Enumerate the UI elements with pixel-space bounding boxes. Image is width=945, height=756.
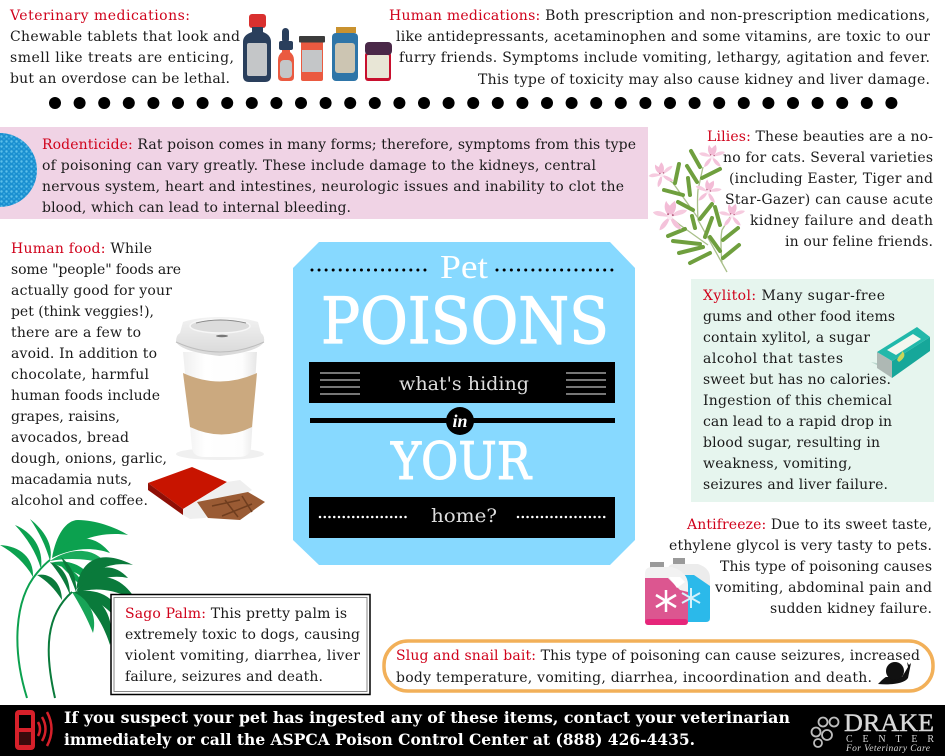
logo: Drake Center: CENTER <box>846 734 934 745</box>
text block: lilies: kidney failure and death <box>750 213 933 229</box>
text block: human medications <box>389 8 930 88</box>
panel: sago palm <box>111 594 370 694</box>
text block: human food: avoid. In addition to <box>11 346 157 362</box>
panel: xylitol: gums and other food items <box>703 309 895 325</box>
panel: rodenticide: of poisoning can vary greatly. These include damage to the kidneys, central <box>42 158 597 174</box>
text block: lilies: (including Easter, Tiger and <box>729 171 933 187</box>
panel: xylitol: seizures and liver failure. <box>703 477 888 493</box>
text block: human food: actually good for your <box>11 283 172 299</box>
icon: snail <box>878 662 911 684</box>
text block: human food: there are a few to <box>11 325 141 341</box>
band: what's hiding: what's hiding <box>399 373 529 395</box>
panel: xylitol: contain xylitol, a sugar <box>703 330 870 346</box>
dotted rule: top left <box>312 268 432 272</box>
text block: antifreeze: ethylene glycol is very tasty to pets. <box>669 538 932 554</box>
panel: xylitol: Xylitol: Many sugar-free <box>703 288 885 304</box>
panel: sago palm: violent vomiting, diarrhea, liver <box>124 648 360 664</box>
panel: slug and snail bait: Slug and snail bait: This type of poisoning can cause seizures, increased <box>396 648 920 664</box>
band: what's hiding <box>309 362 615 403</box>
text block: human medications: furry friends. Symptoms include vomiting, lethargy, agitation and fever. <box>399 50 930 66</box>
icon: blue pellets circle <box>0 133 37 207</box>
heading: POISONS: POISONS <box>321 285 609 359</box>
text block: human food: chocolate, harmful <box>11 367 150 383</box>
dotted rule: top right <box>497 268 612 272</box>
panel: xylitol: Ingestion of this chemical <box>703 393 893 409</box>
text block: human food: grapes, raisins, <box>11 409 120 425</box>
panel: sago palm: Sago Palm: This pretty palm is <box>125 606 347 622</box>
dotted divider <box>49 97 897 109</box>
text block: human medications: This type of toxicity may also cause kidney and liver damage. <box>478 72 930 88</box>
text block: human food: alcohol and coffee. <box>11 493 148 509</box>
icon: gum pack <box>871 327 930 378</box>
text block: antifreeze: This type of poisoning causes <box>720 559 932 575</box>
text block: human food: dough, onions, garlic, <box>11 451 167 467</box>
panel: xylitol: weakness, vomiting, <box>703 456 852 472</box>
icon: coffee cup <box>176 317 264 460</box>
icon: phone <box>15 710 52 750</box>
panel: xylitol: blood sugar, resulting in <box>703 435 880 451</box>
text block: lilies: Star-Gazer) can cause acute <box>725 192 933 208</box>
footer message: immediately or call the ASPCA Poison Control Center at (888) 426-4435. <box>64 730 695 749</box>
icon: antifreeze jugs <box>645 558 710 625</box>
text block: lilies: Lilies: These beauties are a no- <box>707 129 933 145</box>
text block: human food: pet (think veggies!), <box>11 304 154 320</box>
text block: antifreeze: Antifreeze: Due to its sweet taste, <box>686 517 932 533</box>
icon: lily plant <box>646 145 745 272</box>
text block: human medications: Human medications: Both prescription and non-prescription medications, <box>389 8 930 24</box>
band: home? <box>309 497 615 538</box>
heading: YOUR: YOUR <box>390 433 532 492</box>
panel: rodenticide: Rodenticide: Rat poison comes in many forms; therefore, symptoms from this type <box>42 137 636 153</box>
panel: sago palm: failure, seizures and death. <box>125 669 323 685</box>
text block: antifreeze: sudden kidney failure. <box>770 601 932 617</box>
text block: lilies: in our feline friends. <box>785 234 933 250</box>
panel: slug and snail bait: body temperature, vomiting, diarrhea, incoordination and death. <box>396 670 872 686</box>
footer message <box>64 708 790 749</box>
text block: human food: avocados, bread <box>11 430 129 446</box>
text block: human food: human foods include <box>11 388 160 404</box>
text block: veterinary medications <box>9 8 240 87</box>
panel: xylitol: can lead to a rapid drop in <box>703 414 892 430</box>
footer bar <box>0 705 945 756</box>
text block: antifreeze: vomiting, abdominal pain and <box>714 580 932 596</box>
panel: sago palm: extremely toxic to dogs, causing <box>125 627 360 643</box>
text block: lilies: no for cats. Several varieties <box>723 150 933 166</box>
text block: veterinary medications: Chewable tablets that look and <box>10 29 240 45</box>
text block: veterinary medications: Veterinary medications: <box>9 8 190 24</box>
logo: Drake Center: DRAKE <box>844 710 934 737</box>
text block: veterinary medications: smell like treats are enticing, <box>10 50 234 66</box>
text block: veterinary medications: but an overdose can be lethal. <box>10 71 230 87</box>
text block: human medications: like antidepressants, acetaminophen and some vitamins, are toxic to our <box>396 29 930 45</box>
text block: human food <box>11 241 181 509</box>
divider with "in" badge <box>310 407 615 435</box>
icon: chocolate bar <box>148 467 265 520</box>
panel: rodenticide <box>0 127 648 219</box>
text block: human food: Human food: While <box>11 241 152 257</box>
text block: human food: some "people" foods are <box>11 262 181 278</box>
panel: xylitol <box>691 279 934 502</box>
panel: rodenticide: nervous system, heart and intestines, neurologic issues and inability to clot the <box>42 179 624 195</box>
panel: rodenticide: blood, which can lead to internal bleeding. <box>42 200 351 216</box>
panel: xylitol: sweet but has no calories. <box>703 372 891 388</box>
icon: medication bottles <box>243 14 392 82</box>
logo: Drake Center <box>812 710 934 754</box>
text block: human food: macadamia nuts, <box>11 472 132 488</box>
divider with "in" badge: in <box>452 411 468 431</box>
text block: antifreeze <box>669 517 932 617</box>
band: home?: home? <box>431 505 497 527</box>
panel: slug and snail bait <box>384 641 933 691</box>
title panel <box>293 242 635 565</box>
footer message: If you suspect your pet has ingested any of these items, contact your veterinarian <box>64 708 790 727</box>
logo: Drake Center: For Veterinary Care <box>845 744 930 754</box>
panel: xylitol: alcohol that tastes <box>703 351 843 367</box>
heading: Pet: Pet <box>440 249 489 286</box>
icon: sago palm <box>0 519 137 698</box>
text block: lilies <box>707 129 933 250</box>
